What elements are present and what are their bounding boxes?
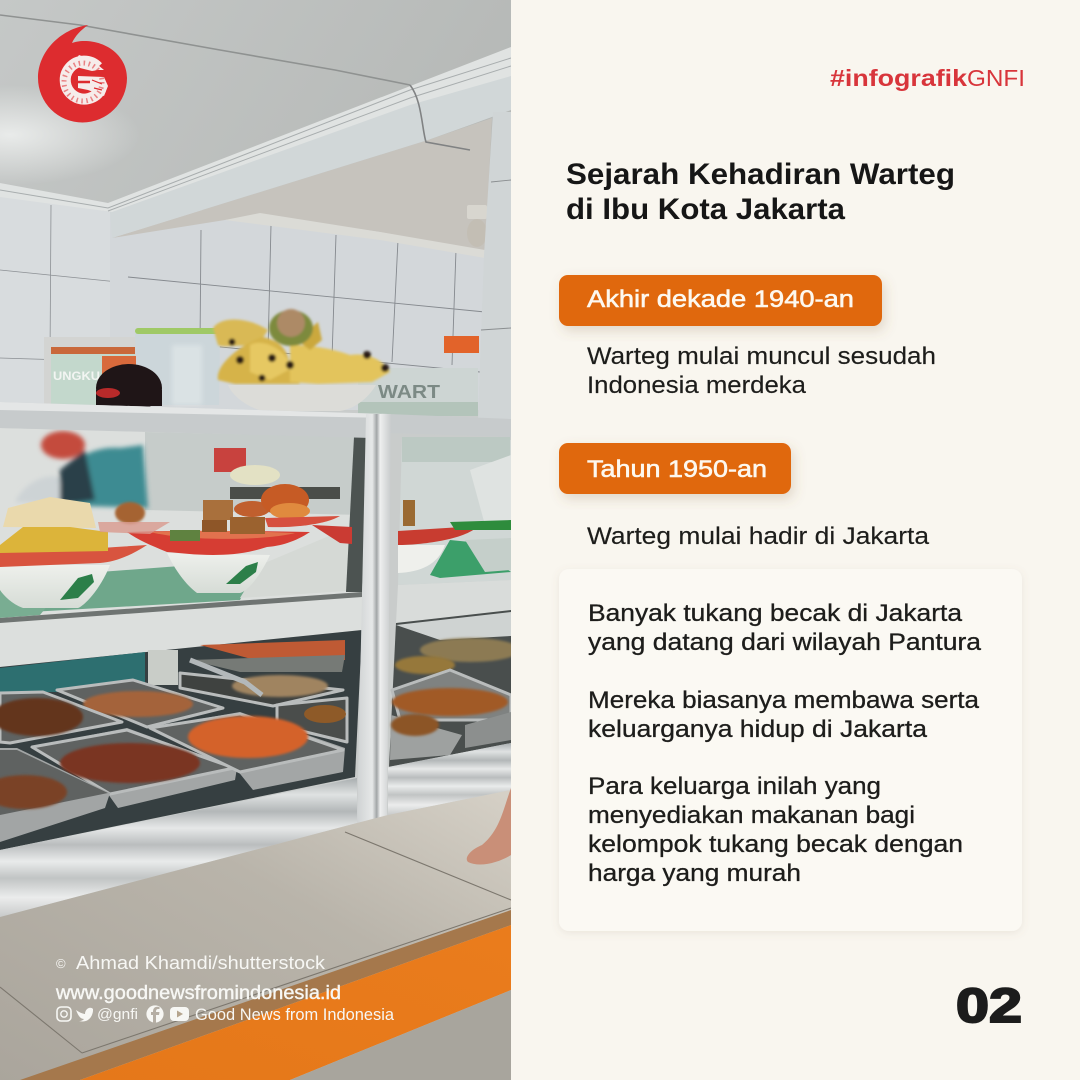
social handles and icons	[57, 1005, 395, 1024]
WARTEG reflective sign	[358, 368, 478, 416]
paragraph: tukang becak: Banyak tukang becak di Jakarta	[588, 600, 963, 627]
food tray: orange tofu	[148, 712, 345, 790]
display case top frame	[0, 402, 511, 438]
left wall tiles	[0, 197, 110, 404]
badge: Akhir dekade 1940-an: Akhir dekade 1940-an	[587, 286, 854, 313]
paragraph: keluarga: keluarganya hidup di Jakarta	[588, 716, 928, 743]
title	[566, 158, 955, 226]
person behind counter: head	[96, 364, 162, 406]
paragraph: tukang becak	[588, 600, 982, 656]
white plate	[228, 385, 376, 411]
icon: youtube	[170, 1007, 189, 1021]
badge: Tahun 1950-an: Tahun 1950-an	[587, 456, 767, 483]
centre vertical post	[357, 414, 391, 823]
orange counter edge	[20, 910, 511, 1080]
orange wall panel	[444, 336, 479, 353]
photo base	[0, 410, 511, 1080]
upper ceiling shadow	[112, 118, 492, 252]
badge: Akhir dekade 1940-an	[559, 275, 882, 326]
doorway sign "UNGKU": UNGKU	[53, 369, 100, 383]
hashtag: #infografik	[830, 65, 967, 91]
right glass display	[398, 437, 511, 585]
icon: instagram	[57, 1007, 71, 1021]
paragraph: makanan murah: Para keluarga inilah yang	[588, 773, 881, 800]
text block: Warteg mulai muncul	[587, 343, 936, 399]
floor below counter	[290, 990, 511, 1080]
ribbed aluminium base	[0, 743, 511, 917]
food tray: fried noodles	[57, 680, 223, 727]
lamp	[467, 205, 487, 247]
food on red plates	[0, 484, 352, 608]
G emblem	[64, 55, 108, 101]
WARTEG reflective sign: WART	[378, 382, 440, 402]
paragraph: makanan murah: kelompok tukang becak dengan	[588, 831, 963, 858]
icon: facebook	[146, 1005, 164, 1023]
website url: www.goodnewsfromindonesia.id	[55, 982, 341, 1004]
hashtag: GNFI	[967, 65, 1025, 91]
paragraph: makanan murah	[588, 773, 963, 887]
paragraph: keluarga	[588, 687, 980, 743]
text block: Warteg mulai muncul: Warteg mulai muncul sesudah	[587, 343, 936, 370]
bowl centre with tempeh	[98, 484, 340, 593]
food tray: bottom left	[0, 748, 110, 842]
middle shelf frame	[0, 580, 511, 667]
photo credit: ©	[56, 956, 66, 971]
icon: twitter	[76, 1008, 93, 1022]
photo credit: Ahmad Khamdi/shutterstock	[76, 952, 326, 973]
paragraph: makanan murah: harga yang murah	[588, 860, 801, 887]
bowl left with tofu	[0, 497, 147, 608]
upper glass display	[0, 428, 370, 618]
title: Sejarah Kehadiran Warteg	[566, 158, 955, 191]
ceiling	[0, 0, 511, 203]
paragraph: makanan murah: menyediakan makanan bagi	[588, 802, 915, 829]
back wall tiles	[110, 210, 490, 410]
right pillar	[478, 112, 511, 420]
ceiling beam	[118, 76, 511, 210]
plastic jar	[135, 328, 220, 405]
tongs and vegetables tray	[180, 660, 343, 706]
hashtag	[830, 65, 1025, 91]
hand on counter	[467, 788, 511, 864]
text block: Warteg mulai muncul: Indonesia merdeka	[587, 372, 807, 399]
badge: Tahun 1950-an	[559, 443, 791, 494]
logo: red speech circle with G emblem	[38, 25, 127, 122]
ceiling cornice	[0, 47, 511, 212]
food tray: right	[277, 698, 347, 742]
page number: 02	[956, 980, 1022, 1033]
back wall molding	[226, 213, 484, 253]
right lower glass	[389, 610, 520, 767]
plate right behind	[312, 525, 352, 544]
paragraph: tukang becak: yang datang dari wilayah Pantura	[588, 629, 982, 656]
photo: warteg food display counter	[0, 0, 520, 1080]
title: di Ibu Kota Jakarta	[566, 193, 845, 226]
panel: becak history card	[559, 569, 1022, 931]
food tray: minced meat	[30, 728, 237, 808]
doorway sign "UNGKU"	[44, 337, 136, 407]
text block: Warteg mulai hadir: Warteg mulai hadir di Jakarta	[587, 523, 930, 550]
paragraph: keluarga: Mereka biasanya membawa serta	[588, 687, 980, 714]
handle: @gnfi	[97, 1007, 138, 1023]
page name: Good News from Indonesia	[195, 1006, 395, 1024]
person in teal reflected	[15, 431, 148, 508]
food tray: sambal dish	[0, 692, 122, 743]
lower glass display	[0, 630, 362, 850]
tiled counter top	[0, 790, 511, 1080]
bananas	[213, 309, 390, 384]
